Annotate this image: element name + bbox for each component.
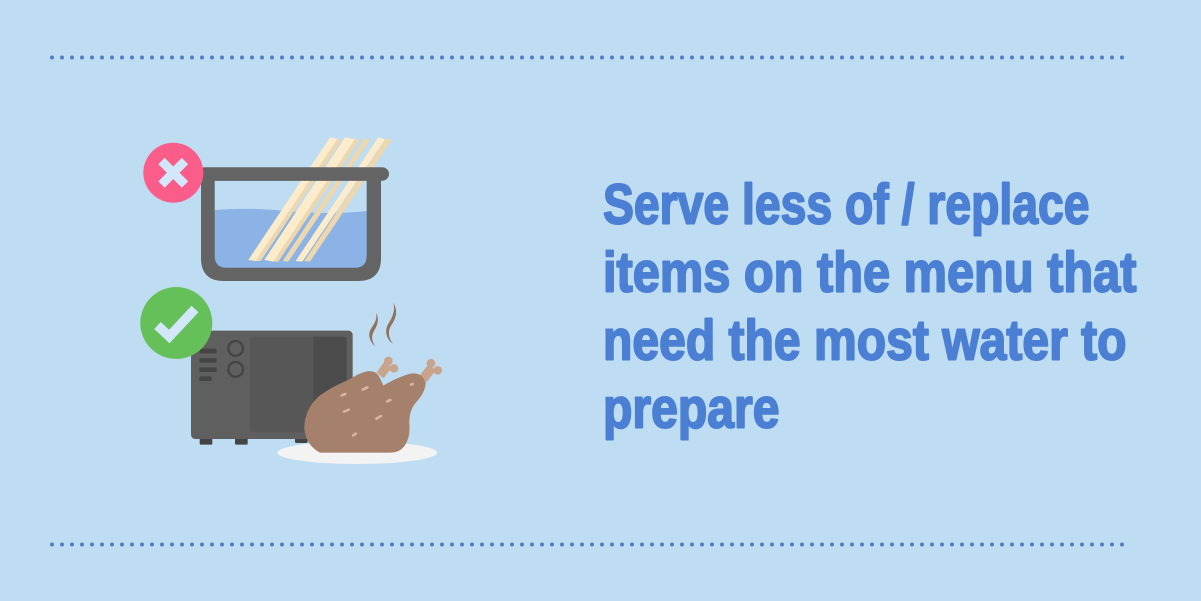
plate [277,441,437,464]
pot water [214,209,367,268]
icon: roast chicken on plate [277,303,442,464]
pot rim [205,167,382,181]
noodles [248,137,392,262]
icon: red cross badge [143,143,203,203]
icon: microwave [191,331,353,445]
heading text [603,172,1137,440]
chicken flecks [342,384,413,435]
microwave knobs [228,341,243,377]
microwave window [250,337,347,432]
heading text: prepare [603,376,780,440]
chicken bones [377,357,442,382]
microwave vents [199,349,217,381]
icon: green check badge [140,287,212,359]
chicken body [304,371,426,453]
icon: pot of boiling noodles [201,137,392,281]
steam [369,303,396,346]
pot body [201,174,381,281]
microwave body [191,331,353,439]
microwave feet [200,437,308,445]
heading text: Serve less of / replace [603,172,1090,236]
